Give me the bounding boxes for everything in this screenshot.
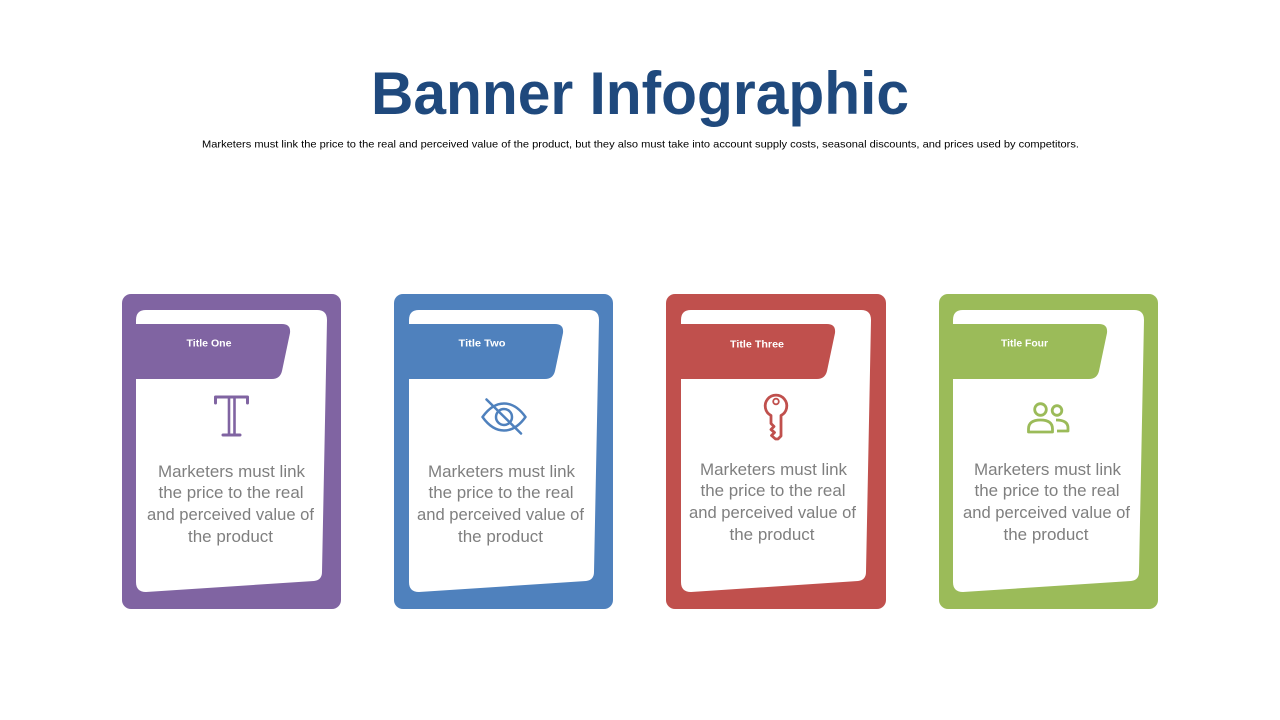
card three inner sheet xyxy=(681,310,871,592)
panel: card two xyxy=(394,294,613,609)
panel: card three xyxy=(666,294,886,609)
card three text: and perceived value of xyxy=(689,503,856,522)
card four text: the price to the real xyxy=(974,481,1120,500)
icon: crossed-out eye xyxy=(482,400,526,434)
card four text: the product xyxy=(1004,525,1089,544)
title: Banner Infographic xyxy=(371,60,909,127)
card one frame xyxy=(122,294,341,609)
card three frame xyxy=(666,294,886,609)
card two text: the price to the real xyxy=(428,483,574,502)
card two text: the product xyxy=(458,527,543,546)
card one text: Marketers must link xyxy=(158,462,305,481)
card two text xyxy=(417,462,584,546)
card one text: the price to the real xyxy=(158,483,304,502)
card one title: Title One xyxy=(186,338,232,350)
card two inner sheet xyxy=(409,310,599,592)
card three text: the price to the real xyxy=(700,481,846,500)
card four banner xyxy=(953,324,1107,379)
icon: two people xyxy=(1028,404,1068,432)
card three text: Marketers must link xyxy=(700,460,847,479)
card three text: the product xyxy=(730,525,815,544)
card one inner sheet xyxy=(136,310,327,592)
card three banner xyxy=(681,324,835,379)
card two text: and perceived value of xyxy=(417,505,584,524)
subtitle: Marketers must link the price to the real and perceived value of the product, but they also must take into account supply costs, seasonal discounts, and prices used by competitors. xyxy=(202,138,1079,150)
card four inner sheet xyxy=(953,310,1144,592)
card one text: and perceived value of xyxy=(147,505,314,524)
card one banner xyxy=(136,324,290,379)
card four text xyxy=(963,460,1130,544)
icon: letter T xyxy=(216,397,248,435)
panel: card four xyxy=(939,294,1158,609)
card four title: Title Four xyxy=(1001,338,1048,350)
card two banner xyxy=(409,324,563,379)
icon: key xyxy=(765,395,787,439)
card three text xyxy=(689,460,856,544)
card three title: Title Three xyxy=(730,338,784,350)
panel: card one xyxy=(122,294,341,609)
card one text xyxy=(147,462,314,546)
card two frame xyxy=(394,294,613,609)
card four frame xyxy=(939,294,1158,609)
card four text: and perceived value of xyxy=(963,503,1130,522)
card two title: Title Two xyxy=(458,338,506,350)
card two text: Marketers must link xyxy=(428,462,575,481)
card one text: the product xyxy=(188,527,273,546)
card four text: Marketers must link xyxy=(974,460,1121,479)
